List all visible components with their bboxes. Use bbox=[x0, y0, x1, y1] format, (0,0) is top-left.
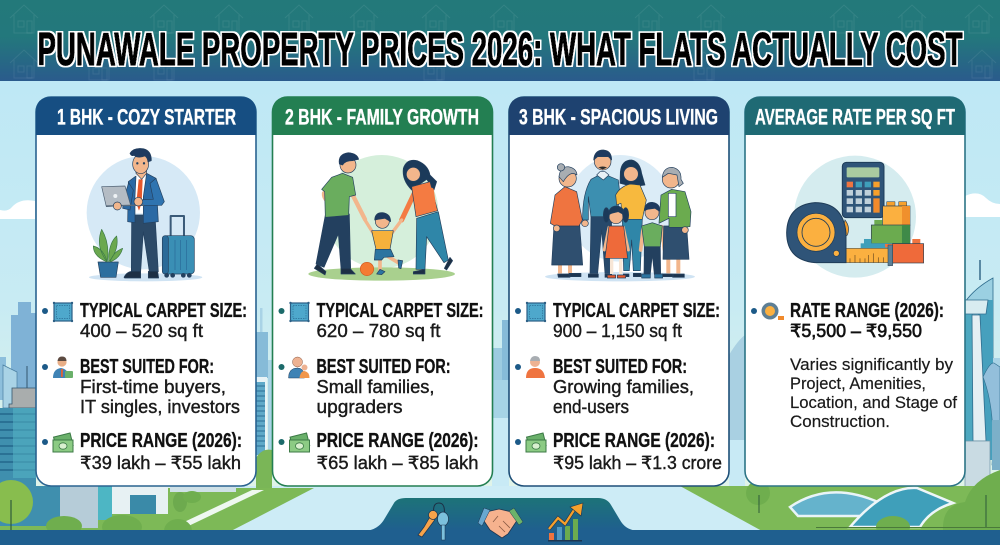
icon: tape measure bbox=[762, 302, 784, 320]
item: carpet size: TYPICAL CARPET SIZE: bbox=[316, 300, 484, 322]
panel: 1 BHK bbox=[36, 97, 256, 486]
item: best suited for: upgraders bbox=[316, 397, 402, 417]
illustration: multi-generation family bbox=[545, 150, 695, 281]
icon: growth chart bbox=[548, 503, 583, 542]
item: carpet size: TYPICAL CARPET SIZE: bbox=[553, 300, 720, 322]
clouds bbox=[0, 193, 1000, 219]
item: best suited for: Growing families, bbox=[553, 377, 694, 397]
river bbox=[200, 486, 760, 531]
item: carpet size bbox=[515, 300, 720, 341]
panel heading: average rate bbox=[745, 97, 965, 135]
item: rate range: ₹5,500 – ₹9,550 bbox=[790, 321, 922, 341]
item: carpet size bbox=[42, 300, 247, 341]
item: price range: PRICE RANGE (2026): bbox=[553, 430, 715, 452]
item: best suited for: First-time buyers, bbox=[80, 377, 226, 397]
item: price range: PRICE RANGE (2026): bbox=[316, 430, 478, 452]
panel: 3 BHK bbox=[509, 97, 729, 486]
heading text: 2 BHK: 2 BHK - FAMILY GROWTH bbox=[285, 104, 479, 130]
item: carpet size: 900 – 1,150 sq ft bbox=[553, 321, 682, 341]
left skyline bbox=[0, 302, 272, 490]
illustration: calculator, tape measure and blocks bbox=[787, 156, 924, 278]
item: rate range: RATE RANGE (2026): bbox=[790, 300, 944, 322]
footer bar bbox=[0, 498, 1000, 545]
item: best suited for: BEST SUITED FOR: bbox=[316, 356, 450, 378]
heading text: 3 BHK: 3 BHK - SPACIOUS LIVING bbox=[519, 104, 718, 130]
item: best suited for bbox=[278, 356, 450, 417]
middle skyline bbox=[492, 320, 509, 486]
item: rate range bbox=[751, 300, 944, 341]
item: carpet size: 620 – 780 sq ft bbox=[316, 321, 440, 341]
panel: average rate bbox=[745, 97, 965, 486]
panel heading: 1 BHK bbox=[36, 97, 256, 135]
heading text: 1 BHK: 1 BHK - COZY STARTER bbox=[57, 104, 236, 130]
text block: rate note: Varies significantly by bbox=[790, 355, 953, 374]
item: price range: ₹65 lakh – ₹85 lakh bbox=[316, 453, 478, 473]
item: price range bbox=[515, 430, 722, 473]
text block: rate note: Construction. bbox=[790, 412, 890, 431]
ground bbox=[0, 486, 1000, 531]
icon: professional bbox=[53, 356, 73, 378]
left city and trees bbox=[0, 480, 236, 543]
panel: 2 BHK bbox=[272, 97, 492, 486]
panel heading: 3 BHK bbox=[509, 97, 729, 135]
item: best suited for: BEST SUITED FOR: bbox=[553, 356, 687, 378]
item: price range bbox=[42, 430, 242, 473]
item: carpet size: 400 – 520 sq ft bbox=[80, 321, 203, 341]
item: best suited for: Small families, bbox=[316, 377, 434, 397]
text block: rate note: Project, Amenities, bbox=[790, 374, 926, 393]
panel heading: 2 BHK bbox=[272, 97, 492, 135]
icon: parent and child bbox=[288, 357, 310, 378]
item: price range: ₹95 lakh – ₹1.3 crore bbox=[553, 453, 722, 473]
icon: grandmother bbox=[526, 356, 545, 378]
text block: rate note: Location, and Stage of bbox=[790, 393, 957, 412]
item: carpet size: TYPICAL CARPET SIZE: bbox=[80, 300, 247, 322]
item: price range bbox=[278, 430, 478, 473]
header band bbox=[0, 0, 1000, 81]
icon: handshake bbox=[478, 508, 523, 538]
item: price range: PRICE RANGE (2026): bbox=[80, 430, 242, 452]
illustration: professional with laptop and suitcase bbox=[87, 148, 202, 281]
item: best suited for: end-users bbox=[553, 397, 629, 417]
item: price range: ₹39 lakh – ₹55 lakh bbox=[80, 453, 241, 473]
right city domes and trees bbox=[746, 470, 1000, 538]
item: carpet size bbox=[278, 300, 484, 341]
icon: keys bbox=[418, 503, 448, 540]
illustration: family with child and ball bbox=[308, 153, 455, 281]
item: best suited for: BEST SUITED FOR: bbox=[80, 356, 214, 378]
item: best suited for: IT singles, investors bbox=[80, 397, 240, 417]
item: best suited for bbox=[515, 356, 694, 417]
right skyline bbox=[729, 260, 1000, 490]
text block: rate note bbox=[790, 355, 957, 431]
item: best suited for bbox=[42, 356, 240, 417]
